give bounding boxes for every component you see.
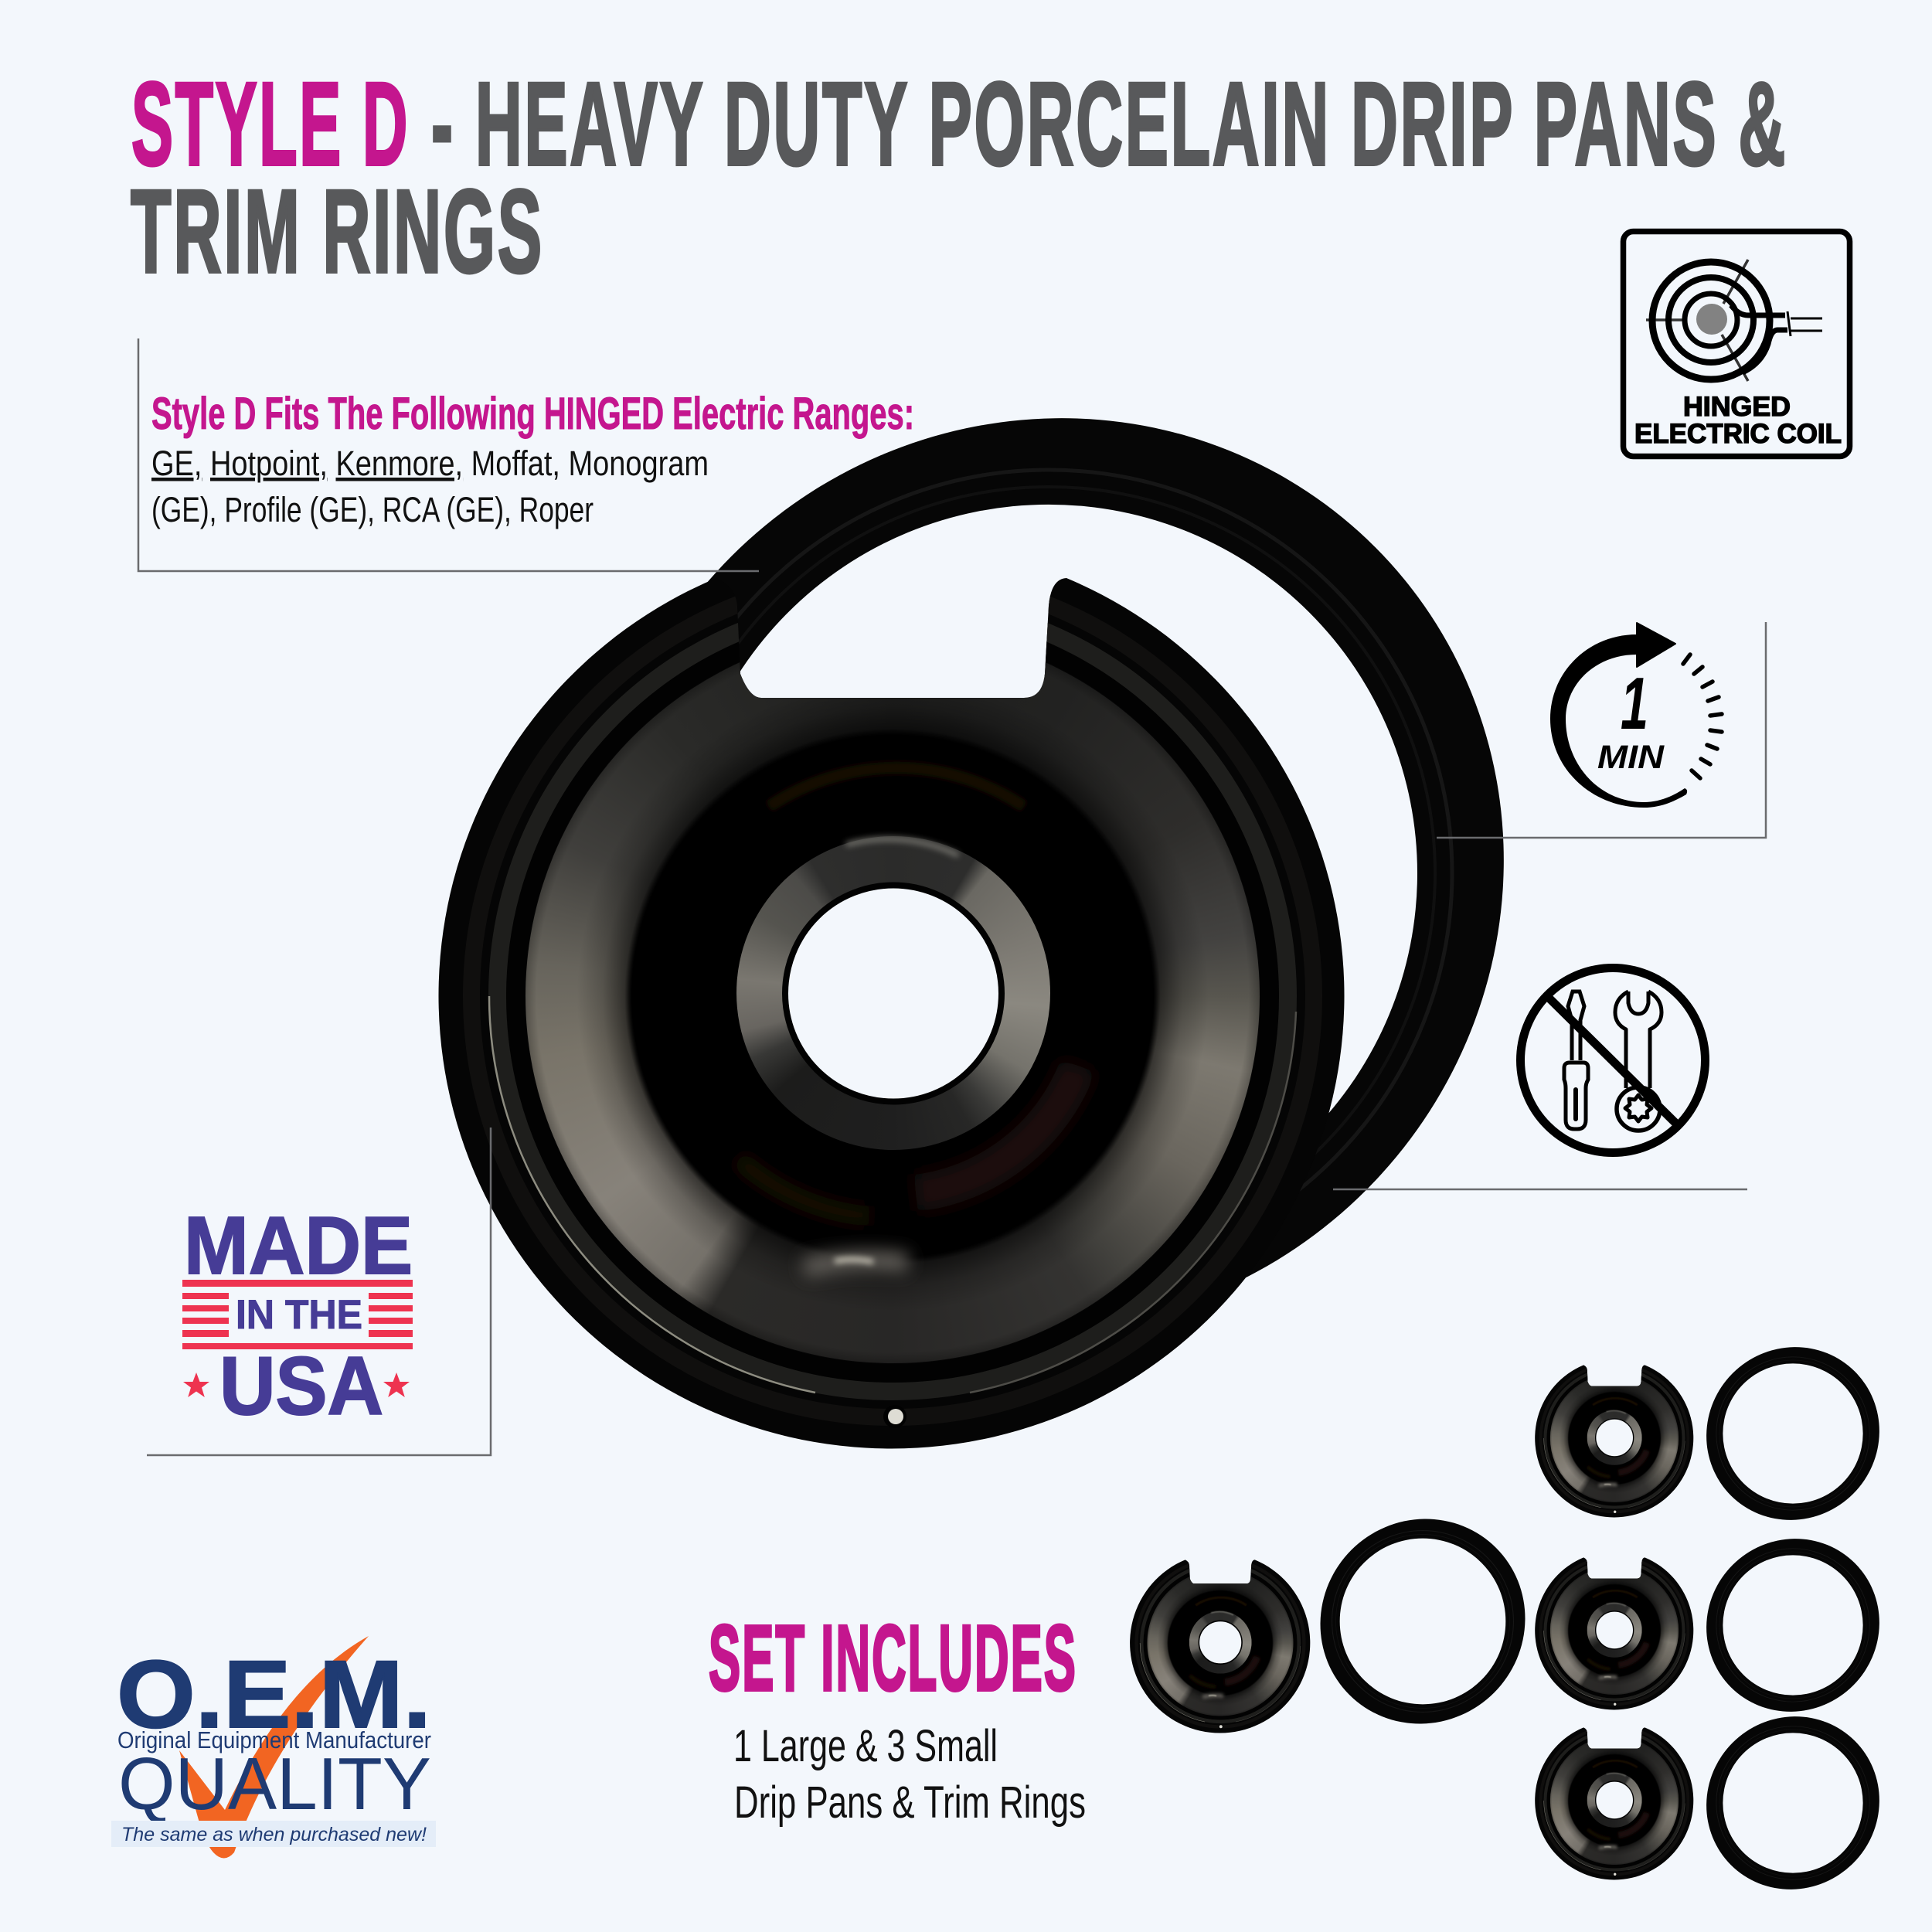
set: small pan 2	[1535, 1557, 1693, 1709]
fit list text block: (GE), Profile (GE), RCA (GE), Roper	[151, 490, 594, 529]
logo: O.E.M. quality: Original Equipment Manufacturer	[117, 1726, 431, 1753]
icon: one minute timer	[1550, 623, 1722, 808]
set: large pan	[1130, 1560, 1310, 1733]
logo: O.E.M. quality	[111, 1636, 436, 1858]
badge: made in the USA: IN THE	[236, 1292, 362, 1338]
badge: made in the USA: MADE	[184, 1200, 413, 1291]
main drip pan	[439, 575, 1345, 1448]
set: small pan 1	[1535, 1365, 1693, 1517]
icon: hinged electric coil badge: ELECTRIC COIL	[1634, 419, 1842, 449]
logo: O.E.M. quality: The same as when purchased new!	[121, 1824, 427, 1845]
set: small ring 2	[1706, 1539, 1879, 1712]
set: large ring	[1321, 1519, 1525, 1723]
fit list text block: Style D Fits The Following HINGED Electric Ranges:	[151, 389, 914, 439]
logo: O.E.M. quality: O.E.M.	[117, 1641, 431, 1748]
logo: O.E.M. quality: QUALITY	[118, 1743, 431, 1825]
set: small ring 3	[1706, 1716, 1879, 1889]
set: small pan 3	[1535, 1727, 1693, 1879]
icon: hinged electric coil badge	[1623, 232, 1850, 456]
set includes text block: Drip Pans & Trim Rings	[734, 1777, 1086, 1828]
icon: one minute timer: 1	[1621, 662, 1648, 745]
fit list text block	[151, 389, 914, 529]
icon: no tools required	[1521, 968, 1705, 1153]
fit list text block: GE, Hotpoint, Kenmore, Moffat, Monogram	[151, 444, 709, 483]
set includes text block: 1 Large & 3 Small	[733, 1721, 998, 1771]
badge: made in the USA	[182, 1200, 413, 1432]
title: STYLE D	[131, 58, 410, 190]
badge: made in the USA: USA	[219, 1339, 383, 1432]
set: small ring 1	[1706, 1347, 1879, 1520]
icon: one minute timer: MIN	[1597, 739, 1665, 776]
callout lines	[138, 338, 1766, 1455]
set includes text block	[709, 1605, 1086, 1828]
main trim ring	[594, 418, 1504, 1328]
set includes text block: SET INCLUDES	[709, 1605, 1077, 1710]
title: TRIM RINGS	[131, 165, 544, 298]
icon: hinged electric coil badge: HINGED	[1683, 392, 1791, 422]
title	[131, 58, 1787, 298]
